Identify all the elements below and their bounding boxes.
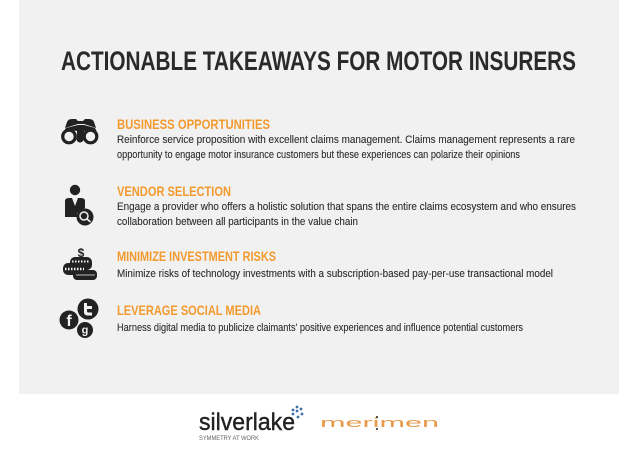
- section: business opportunities: [62, 116, 575, 161]
- section: minimize investment risks: [63, 246, 553, 280]
- icon: coins: $: [78, 246, 85, 260]
- text line 2: collaboration between all participants in the value chain: [117, 216, 358, 228]
- heading: VENDOR SELECTION: [117, 183, 231, 199]
- section: leverage social media: [60, 298, 523, 338]
- section: vendor selection: [65, 183, 576, 228]
- heading: LEVERAGE SOCIAL MEDIA: [117, 302, 261, 318]
- heading: BUSINESS OPPORTUNITIES: [117, 116, 270, 132]
- text line: Harness digital media to publicize claimants' positive experiences and influence potential customers: [117, 322, 523, 334]
- text line: Minimize risks of technology investments with a subscription-based pay-per-use transactional model: [117, 268, 553, 280]
- logo: silverlake: SYMMETRY AT WORK: [199, 435, 260, 442]
- text line 1: Reinforce service proposition with excellent claims management. Claims management represents a rare: [117, 134, 575, 146]
- icon: binoculars: [62, 119, 98, 143]
- icon: social media: g: [82, 324, 88, 336]
- icon: social media: [60, 298, 98, 338]
- logo: silverlake: silverlake: [199, 409, 295, 436]
- icon: social media: f: [66, 313, 72, 330]
- icon: coins: [63, 246, 97, 280]
- logo: merimen: [320, 415, 439, 430]
- text line 2: opportunity to engage motor insurance customers but these experiences can polarize their opinions: [117, 149, 520, 161]
- heading: MINIMIZE INVESTMENT RISKS: [117, 248, 276, 264]
- icon: person with magnifier: [65, 185, 94, 226]
- logo: merimen: merimen: [320, 415, 439, 430]
- text line 1: Engage a provider who offers a holistic solution that spans the entire claims ecosystem and who ensures: [117, 201, 576, 213]
